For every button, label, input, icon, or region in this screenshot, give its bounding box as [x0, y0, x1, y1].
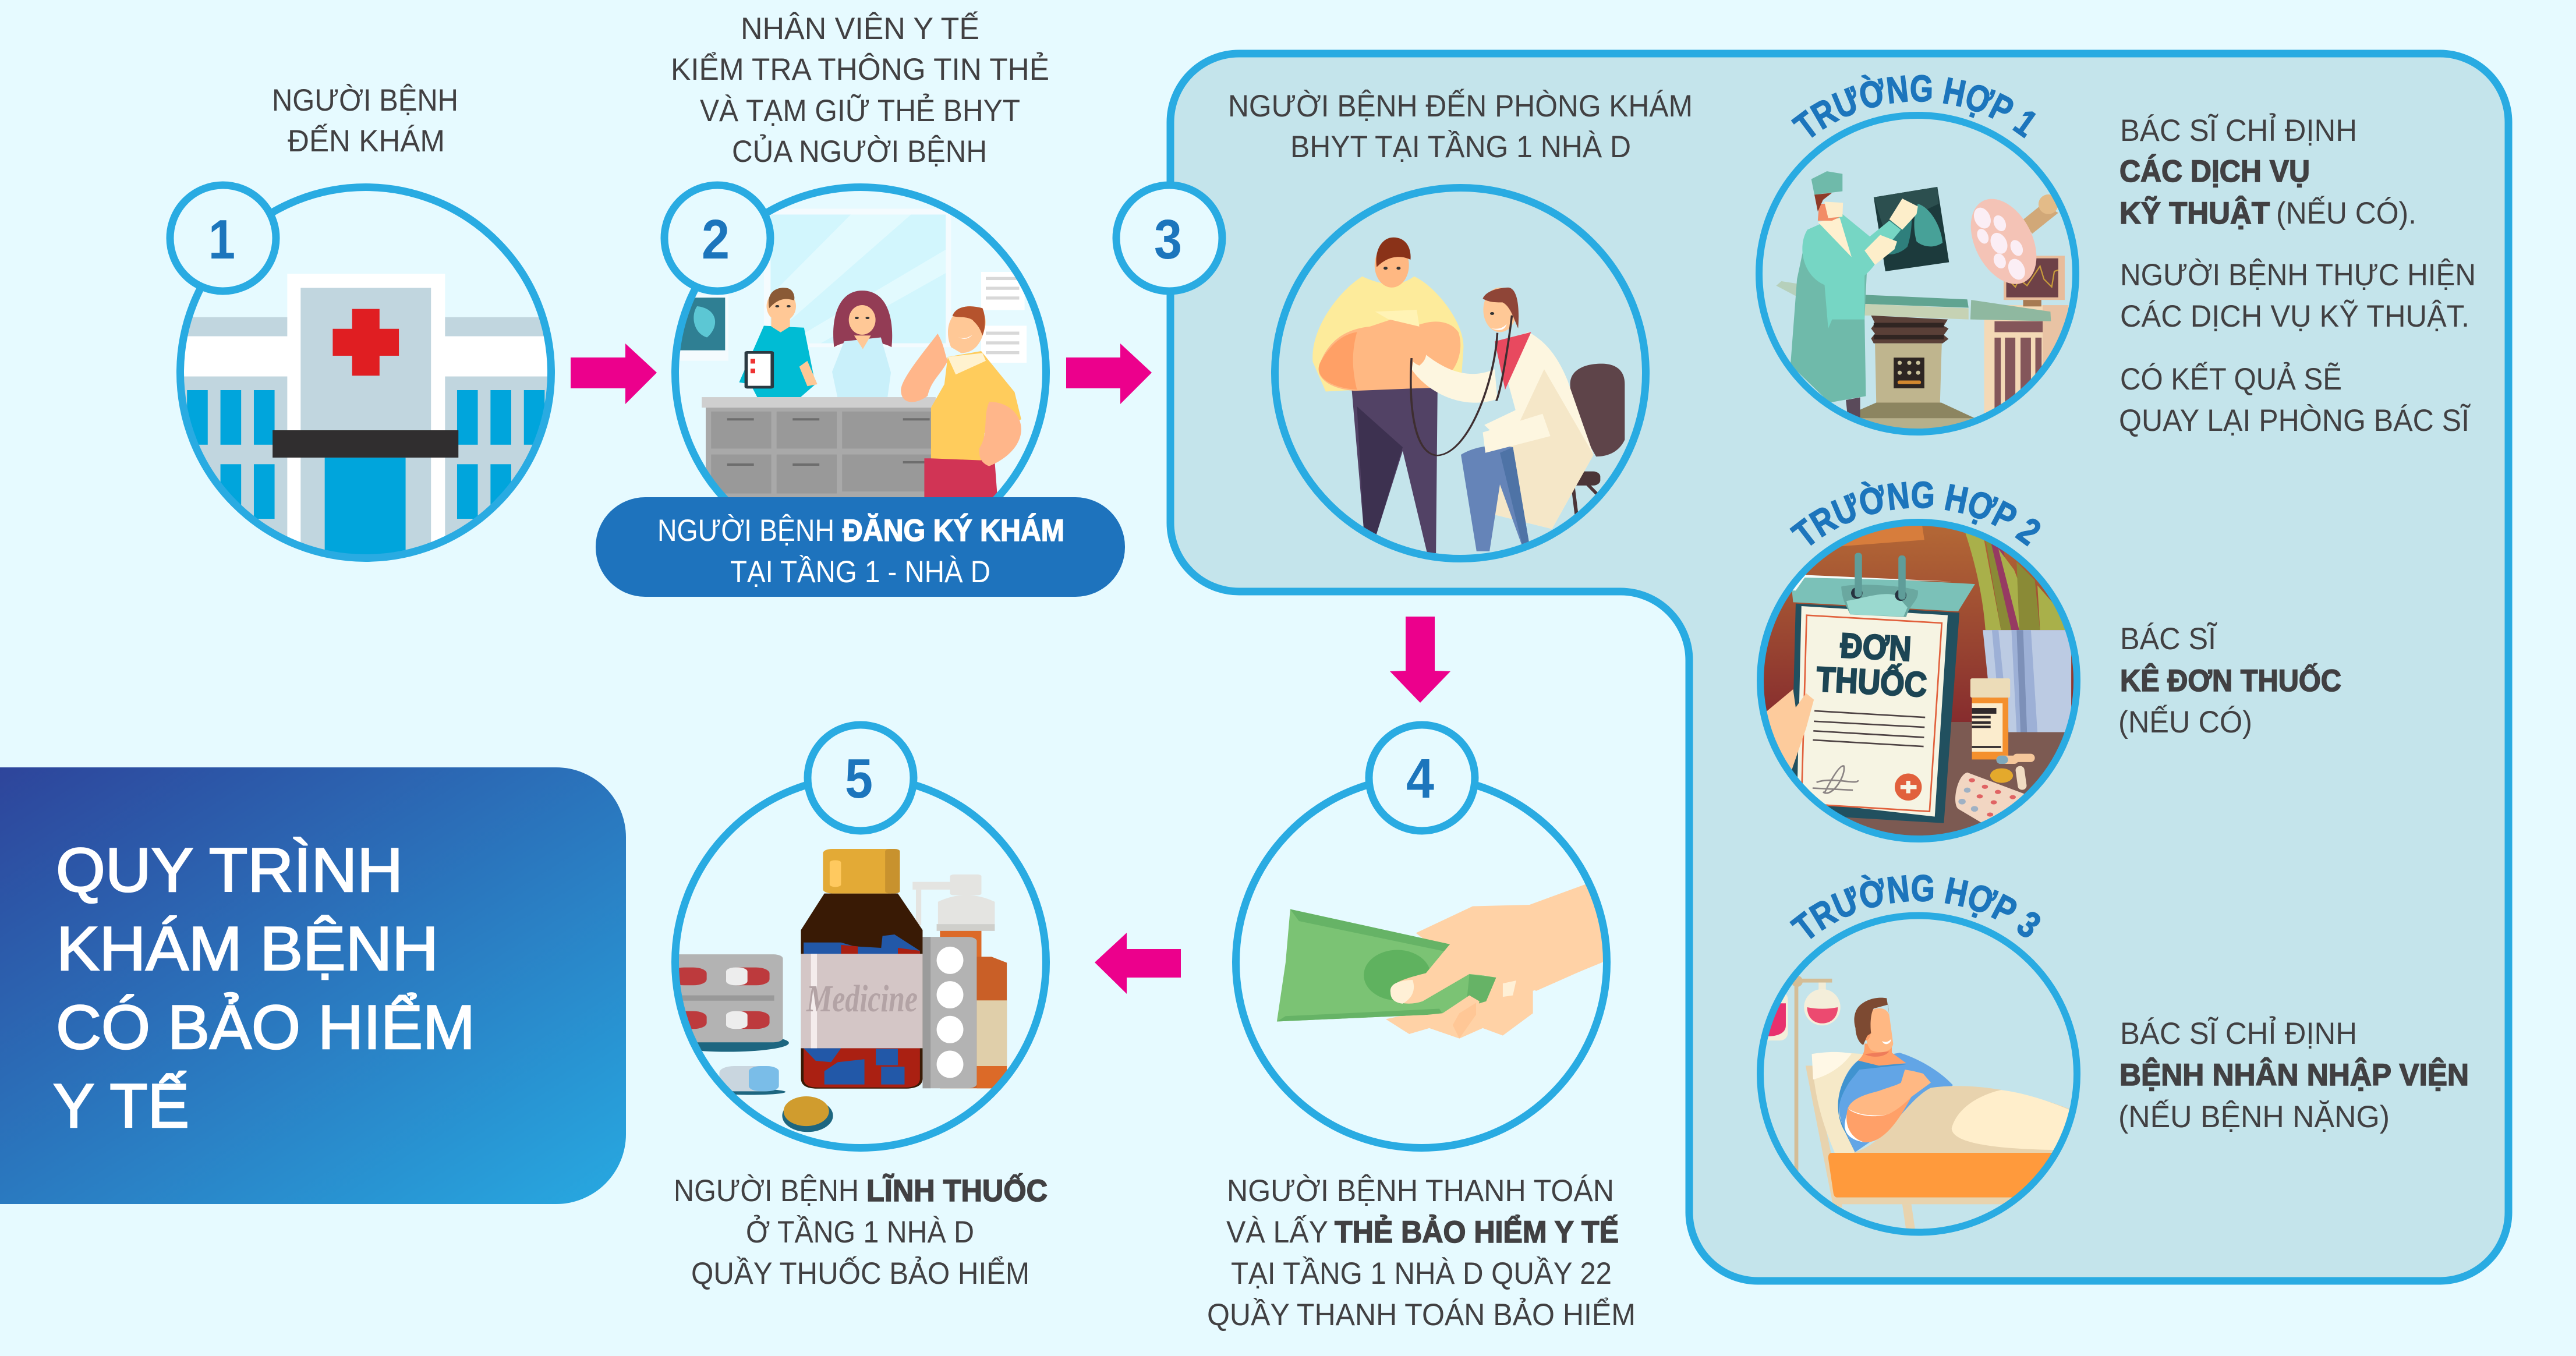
arrow: step 1 to 2 [571, 344, 657, 404]
case 1 text: BÁC SĨ CHỈ ĐỊNH [2120, 113, 2357, 148]
step 1 text [272, 83, 458, 158]
step 2 callout pill [596, 497, 1125, 597]
step 5 text: LĨNH THUỐC [866, 1173, 1048, 1208]
prescription title: ĐƠN [1839, 626, 1912, 668]
illustration 1: hospital [172, 187, 560, 571]
title text: Y TẾ [53, 1071, 189, 1141]
case 1 text: CÁC DỊCH VỤ [2119, 154, 2310, 189]
illustration 3: doctor examining patient [1275, 187, 1646, 559]
step 2 callout pill: NGƯỜI BỆNH [657, 514, 834, 548]
title text: KHÁM BỆNH [56, 914, 438, 983]
step 4 text: QUẦY THANH TOÁN BẢO HIỂM [1207, 1297, 1636, 1332]
step 2 callout pill: ĐĂNG KÝ KHÁM [843, 513, 1064, 548]
step 1 text: ĐẾN KHÁM [288, 123, 445, 158]
badge 1: 1 [208, 208, 235, 271]
step 2 text: NHÂN VIÊN Y TẾ [741, 11, 979, 46]
step 5 text: Ở TẦNG 1 NHÀ D [746, 1215, 974, 1249]
badge 5 [808, 725, 914, 831]
step 2 text: KIỂM TRA THÔNG TIN THẺ [671, 52, 1049, 87]
doctor [1410, 288, 1594, 551]
case 2 text: KÊ ĐƠN THUỐC [2120, 663, 2341, 698]
case 1 text: KỸ THUẬT [2119, 195, 2270, 231]
case 1 text: CÁC DỊCH VỤ KỸ THUẬT. [2120, 299, 2469, 334]
badge 4: 4 [1406, 748, 1434, 810]
woman nurse [832, 291, 892, 397]
step 1 text: NGƯỜI BỆNH [272, 83, 458, 118]
badge 1 [170, 185, 276, 291]
illustration case 2: prescription [1757, 519, 2082, 844]
case 1 text: QUAY LẠI PHÒNG BÁC SĨ [2119, 403, 2471, 438]
step 3 text [1228, 88, 1693, 164]
arrow: step 2 to 3 [1066, 344, 1152, 404]
step 5 text: NGƯỜI BỆNH [674, 1174, 859, 1208]
case 1 heading: TRƯỜNG HỢP 1 [1791, 75, 2036, 139]
case 3 text: BỆNH NHÂN NHẬP VIỆN [2119, 1057, 2469, 1092]
case 1 text: NGƯỜI BỆNH THỰC HIỆN [2120, 258, 2476, 292]
arrow: step 4 to 5 [1095, 933, 1181, 994]
prescription title [1817, 632, 1927, 698]
case 1 text: (NẾU CÓ). [2276, 196, 2416, 231]
title text [53, 835, 475, 1141]
illustration 4: hand paying money [1236, 777, 1623, 1148]
step 2 callout pill: TẠI TẦNG 1 - NHÀ D [730, 554, 990, 589]
case 2 text: (NẾU CÓ) [2118, 704, 2252, 739]
step 5 text: QUẦY THUỐC BẢO HIỂM [691, 1256, 1029, 1291]
case 1 text: CÓ KẾT QUẢ SẼ [2120, 362, 2342, 396]
step 4 text: TẠI TẦNG 1 NHÀ D QUẦY 22 [1231, 1256, 1612, 1291]
prescription title: THUỐC [1816, 660, 1928, 704]
badge 3: 3 [1154, 208, 1182, 271]
case 3 text: BÁC SĨ CHỈ ĐỊNH [2120, 1016, 2357, 1051]
title text: CÓ BẢO HIỂM [56, 992, 475, 1062]
step 4 text: THẺ BẢO HIỂM Y TẾ [1335, 1215, 1619, 1249]
step 3 text: NGƯỜI BỆNH ĐẾN PHÒNG KHÁM [1228, 88, 1693, 123]
badge 3 [1116, 185, 1222, 291]
case 3 heading: TRƯỜNG HỢP 3 [1789, 875, 2040, 939]
illustration case 3: hospitalised patient [1757, 915, 2082, 1232]
illustration 5: medicine [660, 777, 1046, 1148]
patient [1312, 238, 1463, 553]
title panel [0, 767, 626, 1204]
chair [1570, 363, 1625, 515]
case 2 text [2118, 622, 2341, 739]
patient man [901, 306, 1021, 503]
step 5 text [674, 1173, 1048, 1291]
arrow: step 3 to 4 [1390, 617, 1450, 703]
desk [702, 397, 936, 503]
case 2 text: BÁC SĨ [2120, 622, 2217, 656]
step 4 text [1207, 1174, 1636, 1332]
step 4 text: VÀ LẤY [1226, 1215, 1328, 1249]
step 2 text: VÀ TẠM GIỮ THẺ BHYT [700, 93, 1020, 128]
step 4 text: NGƯỜI BỆNH THANH TOÁN [1227, 1174, 1614, 1208]
case 2 heading: TRƯỜNG HỢP 2 [1789, 481, 2040, 547]
badge 2: 2 [702, 208, 730, 271]
case 3 text: (NẾU BỆNH NẶNG) [2118, 1099, 2390, 1134]
illustration case 1: surgeon with x-ray [1759, 115, 2076, 435]
badge 2 [664, 185, 770, 291]
case 1 text [2119, 113, 2476, 438]
step 3 text: BHYT TẠI TẦNG 1 NHÀ D [1290, 129, 1631, 164]
badge 4 [1369, 725, 1475, 831]
medicine label: Medicine [806, 978, 918, 1020]
step 2 text: CỦA NGƯỜI BỆNH [732, 134, 987, 169]
step 2 text [671, 11, 1049, 169]
man nurse [739, 288, 818, 397]
badge 5: 5 [845, 748, 873, 810]
case 3 text [2118, 1016, 2469, 1134]
illustration 2: reception desk [671, 183, 1050, 497]
title text: QUY TRÌNH [56, 835, 403, 905]
panel: step 3 with treatment cases [1170, 54, 2508, 1281]
